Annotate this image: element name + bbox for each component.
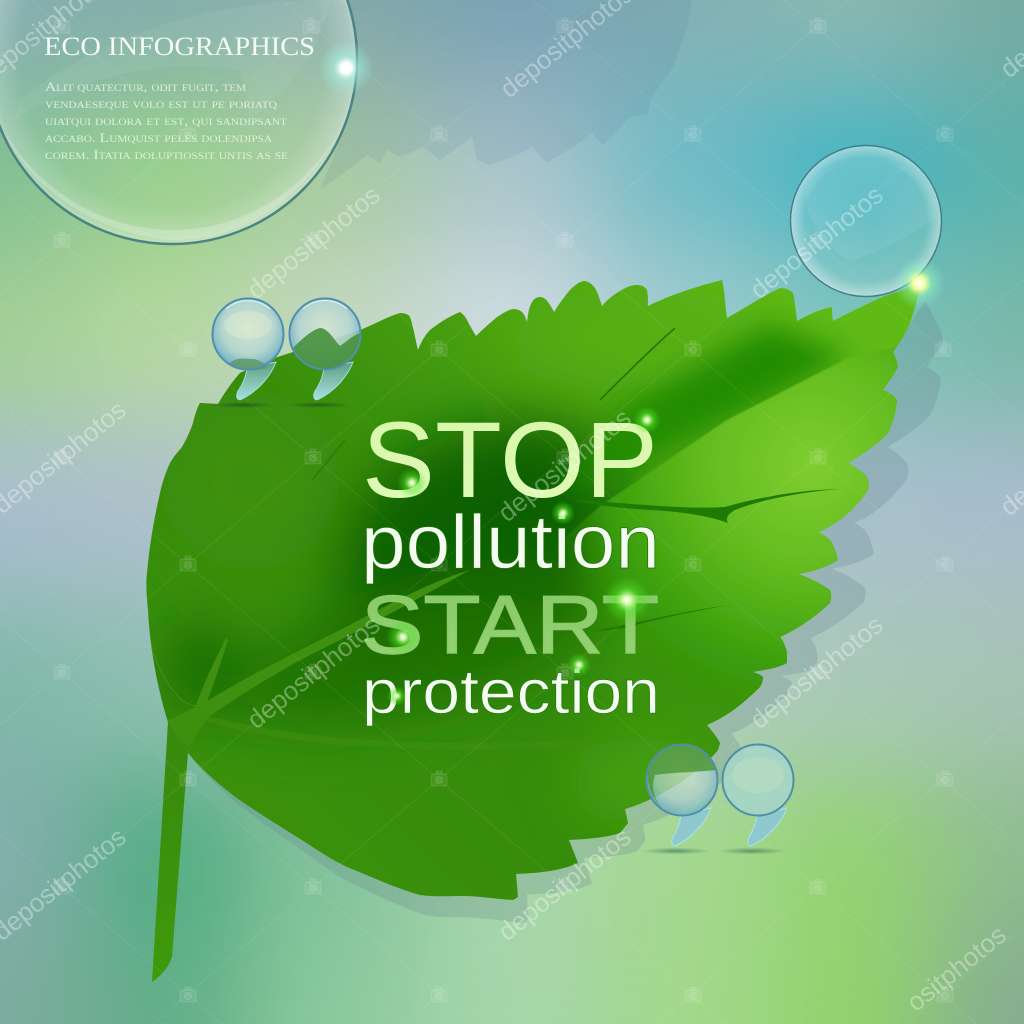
intro paragraph [45, 80, 289, 162]
bubble rim [790, 146, 942, 296]
protection: protection [362, 658, 660, 727]
depositphotos watermarks: depositphotos [744, 609, 889, 735]
intro paragraph: vendaeseque volo est ut pe poriatq [45, 97, 278, 111]
leaf stem [152, 722, 188, 982]
pollution: pollution [361, 500, 660, 585]
intro paragraph: accabo. Lumquist peles dolendipsa [45, 131, 273, 145]
eco infographics title: ECO INFOGRAPHICS [44, 32, 315, 61]
STOP: STOP [362, 399, 658, 520]
quote marks bottom [642, 744, 794, 854]
depositphotos watermarks: ositphotos [901, 919, 1012, 1017]
bubble reflection [805, 159, 937, 262]
depositphotos watermarks: depositphotos [241, 609, 386, 735]
depositphotos watermarks: depositphotos [241, 179, 386, 305]
tip flare [893, 257, 945, 309]
shadow [287, 402, 351, 408]
intro paragraph: corem. Itatia doluptiossit untis as se [45, 148, 289, 162]
bright right sector [566, 346, 898, 710]
shadow [718, 848, 786, 854]
right quote [722, 744, 794, 846]
shadow [642, 848, 710, 854]
bubble inner reflection [15, 0, 330, 120]
sparkles [386, 406, 661, 706]
left quote [212, 298, 284, 400]
intro paragraph: Alit quatectur, odit fugit, tem [45, 80, 246, 94]
small bubble [790, 145, 945, 309]
intro paragraph: uiatqui dolora et est, qui sandipsant [45, 114, 288, 128]
leaf veins [150, 328, 840, 750]
bubble rim [0, 0, 357, 244]
depositphotos watermarks: depositphotos [744, 179, 889, 305]
quote marks top [211, 298, 361, 408]
depositphotos watermarks: depositphotos [492, 821, 637, 947]
START: START [361, 578, 659, 671]
background leaf shadow at top [320, 0, 692, 190]
right quote [289, 298, 361, 400]
depositphotos watermarks: depositphotos [492, 402, 637, 528]
shadow [211, 402, 275, 408]
main message [361, 399, 660, 727]
bubble flare [318, 40, 374, 96]
leaf blade [146, 280, 930, 901]
dark wedge along midrib [560, 325, 850, 500]
leaf [146, 280, 930, 982]
big bubble [0, 0, 374, 245]
shadow of leaf [183, 285, 944, 932]
left quote [646, 744, 718, 846]
